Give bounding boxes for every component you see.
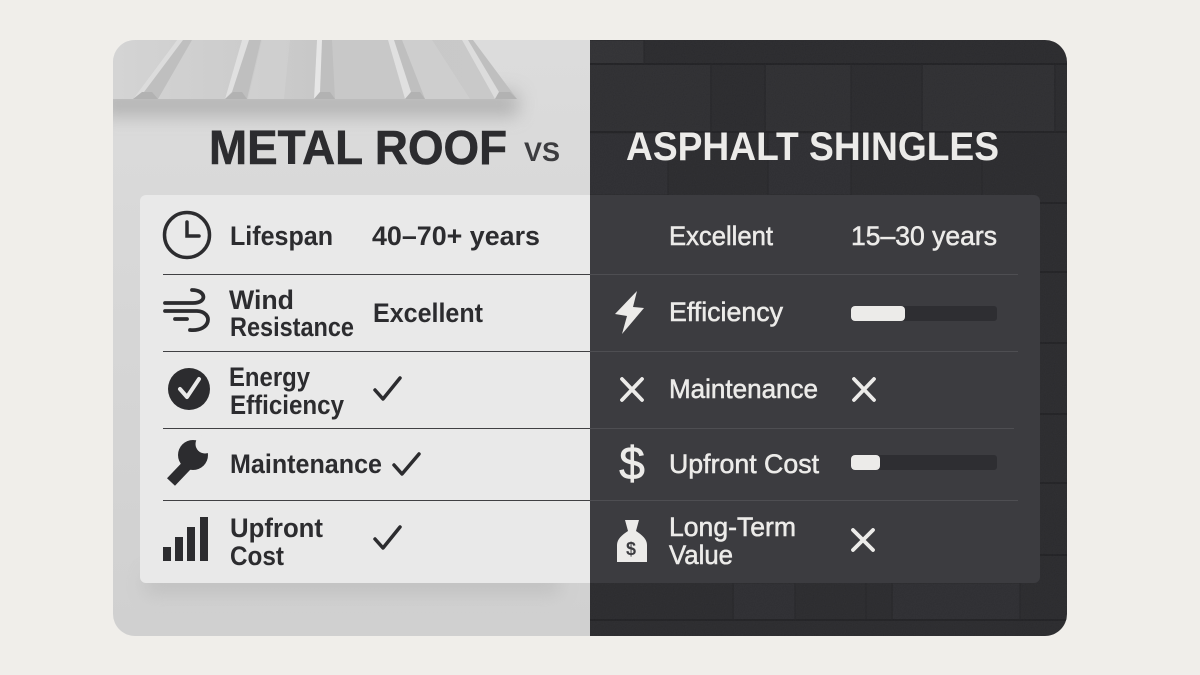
icon: asphalt value cross (853, 530, 873, 550)
icon: check badge (168, 368, 210, 410)
icon: metal upfront check (375, 527, 400, 548)
title: asphalt shingles: ASPHALT SHINGLES (626, 125, 999, 169)
rib 3 (314, 40, 335, 99)
panel: asphalt table (590, 195, 1040, 583)
label: maintenance: Maintenance (669, 374, 818, 404)
label: asphalt excellent: Excellent (669, 221, 773, 251)
label: lifespan: Lifespan (230, 221, 333, 251)
value: asphalt lifespan: 15–30 years (851, 221, 997, 251)
rib 2 (225, 40, 261, 99)
icon: metal maintenance check (394, 454, 419, 474)
label: long-term value: Long-Term (669, 512, 796, 542)
label: energy efficiency: Efficiency (230, 390, 344, 420)
value: metal wind resistance: Excellent (373, 298, 483, 328)
icon: asphalt maintenance cross (854, 379, 874, 400)
label: upfront cost: Upfront (230, 513, 323, 543)
metal table shadow (148, 583, 557, 594)
icon: lightning bolt (615, 291, 644, 334)
title: metal roof: METAL ROOF (209, 122, 507, 175)
rib 5 (462, 40, 517, 99)
rib 1 (133, 40, 192, 99)
panel: comparison card (100, 40, 1067, 636)
icon: metal energy check (375, 378, 400, 399)
label: wind resistance: Resistance (230, 312, 354, 342)
label: upfront cost: Cost (230, 541, 284, 571)
label: maintenance: Maintenance (230, 449, 382, 479)
icon: signal bars (163, 517, 208, 561)
bar: efficiency (851, 306, 997, 321)
icon: money bag (617, 520, 647, 562)
icon: wind (165, 290, 208, 330)
icon: cross (622, 379, 642, 400)
panel: metal roof side (113, 40, 590, 636)
label: energy efficiency: Energy (229, 362, 310, 392)
rib 4 (388, 40, 425, 99)
panel: asphalt shingles side (590, 40, 1067, 636)
label: upfront cost: Upfront Cost (669, 449, 819, 479)
icon: wrench (171, 434, 214, 482)
icon: money bag: $ (626, 539, 636, 559)
title: vs: VS (524, 137, 560, 167)
value: metal lifespan: 40–70+ years (372, 221, 540, 251)
metal roof panels (113, 40, 517, 99)
metal roof shadow (100, 92, 518, 116)
icon: dollar sign: $ (619, 437, 645, 489)
panel: metal roof table (140, 195, 590, 583)
label: efficiency: Efficiency (669, 297, 783, 327)
icon: clock (164, 212, 210, 258)
bar: upfront cost (851, 455, 997, 470)
label: wind resistance: Wind (229, 285, 294, 315)
label: long-term value: Value (669, 540, 733, 570)
